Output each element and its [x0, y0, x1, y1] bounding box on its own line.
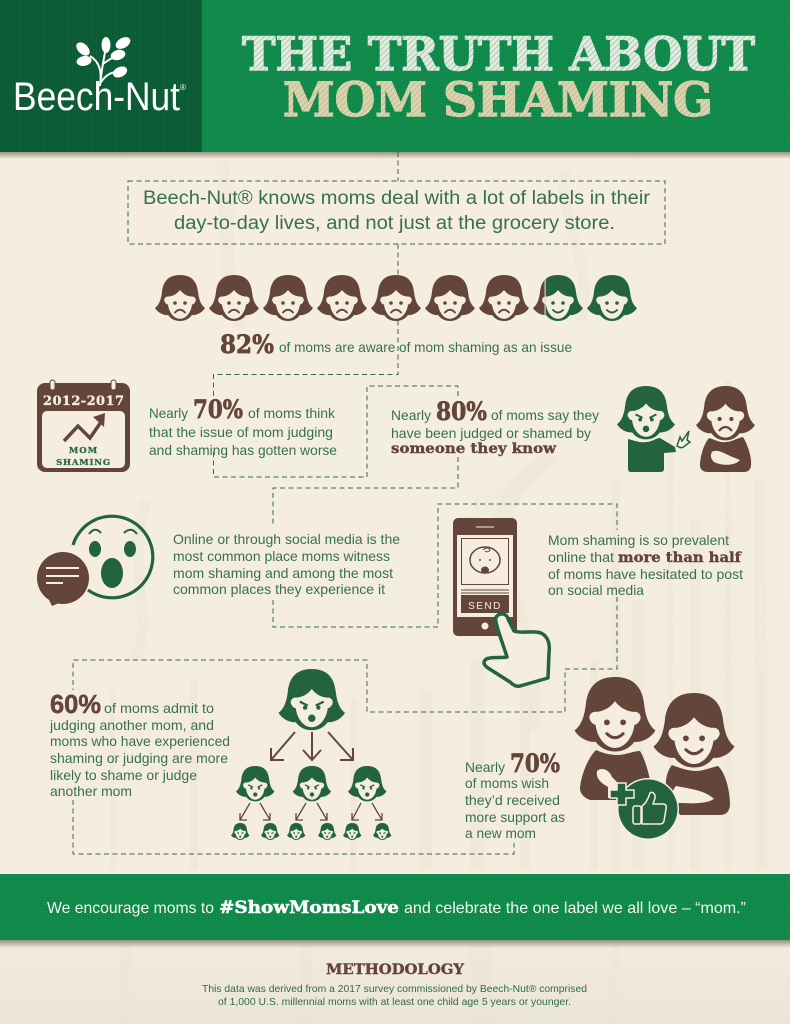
text: hesitated to post: more than half	[618, 550, 742, 566]
methodology text: This data was derived from a 2017 survey commissioned by Beech-Nut® comprised	[202, 983, 587, 995]
stat: 82 percent aware: 82%	[220, 330, 274, 359]
logo wordmark: Beech-Nut	[13, 75, 180, 119]
icon: two smiling moms with thumbs up	[574, 677, 734, 840]
stat: 70 percent wish for support: more support as	[465, 809, 565, 825]
stat: 80 percent judged: someone they know	[391, 441, 557, 457]
pointing mom	[617, 386, 690, 472]
call to action: and celebrate the one label we all love – “mom.”	[404, 900, 746, 917]
stat: 70 percent worse: Nearly	[149, 405, 188, 421]
stat: 70 percent wish for support: a new mom	[465, 825, 536, 841]
stat: 60 percent judging: 60%	[50, 689, 101, 719]
icon: mom pointing at sad mom	[617, 386, 755, 472]
icon: calendar 2012-2017: 2012-2017	[43, 394, 124, 409]
title line 1: THE TRUTH ABOUT	[242, 27, 755, 81]
text: online social media: mom shaming and among the most	[173, 565, 393, 581]
text: online social media	[173, 531, 400, 597]
stat: 60 percent judging: moms who have experienced	[50, 733, 230, 749]
stat: 80 percent judged	[391, 397, 599, 457]
stat: 70 percent worse: that the issue of mom judging	[149, 424, 333, 440]
stat: 80 percent judged: of moms say they	[491, 407, 599, 423]
mom one	[574, 677, 656, 800]
stat: 70 percent worse: and shaming has gotten worse	[149, 442, 337, 458]
stat: 60 percent judging: shaming or judging are more	[50, 750, 228, 766]
stat: 60 percent judging: likely to shame or judge	[50, 767, 197, 783]
text: hesitated to post: on social media	[548, 582, 644, 598]
call to action	[47, 898, 746, 918]
stat: 70 percent wish for support: 70%	[510, 749, 560, 778]
stat: 82 percent aware	[220, 330, 572, 359]
stat: 70 percent wish for support: they’d received	[465, 792, 560, 808]
call to action: We encourage moms to	[47, 900, 214, 917]
logo tree	[74, 35, 132, 86]
mom two	[654, 693, 734, 815]
level two arrows	[240, 803, 382, 820]
row of nine mom faces	[155, 275, 637, 321]
diagram: shaming spreads from mom to mom	[231, 669, 392, 840]
methodology heading: METHODOLOGY	[326, 962, 465, 978]
phone	[453, 518, 517, 636]
stat: 60 percent judging: judging another mom, and	[49, 717, 214, 733]
text: hesitated to post: of moms have hesitated to post	[548, 566, 743, 582]
intro line 1: Beech-Nut® knows moms deal with a lot of labels in their	[143, 188, 651, 209]
text: hesitated to post	[548, 532, 743, 598]
methodology text	[202, 983, 587, 1008]
text: hesitated to post: Mom shaming is so prevalent	[548, 532, 729, 548]
icon: phone with send button and hand	[453, 518, 549, 686]
methodology text: of 1,000 U.S. millennial moms with at least one child age 5 years or younger.	[218, 996, 571, 1008]
icon: calendar 2012-2017	[37, 380, 130, 472]
title line 2: MOM SHAMING	[283, 73, 713, 128]
stat: 70 percent wish for support	[465, 749, 565, 841]
registered mark: ®	[180, 83, 186, 92]
Beech-Nut logo	[13, 35, 186, 119]
call to action: #ShowMomsLove	[219, 898, 399, 918]
pointing hand	[484, 614, 549, 686]
stat: 70 percent wish for support: Nearly	[465, 759, 505, 775]
speech bubble	[37, 552, 89, 606]
stat: 70 percent wish for support: of moms wish	[465, 775, 549, 791]
stat: 80 percent judged: Nearly	[391, 407, 431, 423]
level three moms	[231, 823, 392, 840]
stat: 80 percent judged: have been judged or shamed by	[391, 425, 591, 441]
title	[242, 27, 755, 128]
text: online social media: Online or through social media is the	[173, 531, 400, 547]
stat: 80 percent judged: 80%	[436, 397, 487, 426]
level two moms	[236, 766, 386, 801]
thumbs up badge	[610, 778, 679, 840]
stat: 60 percent judging	[49, 689, 230, 799]
stat: 60 percent judging: another mom	[50, 783, 132, 799]
text: online social media: common places they experience it	[173, 581, 385, 597]
text: online social media: most common place moms witness	[173, 548, 390, 564]
icon: shocked emoji with speech bubble	[37, 516, 153, 606]
level one arrows	[271, 732, 353, 760]
stat: 70 percent worse: of moms think	[248, 405, 336, 421]
header banner	[0, 0, 790, 159]
sad mom with crossed arms	[696, 386, 755, 472]
shocked face	[73, 516, 153, 598]
text: hesitated to post: online that	[548, 549, 614, 565]
stat: 70 percent worse	[149, 395, 337, 458]
methodology	[202, 962, 587, 1008]
stat: 82 percent aware: of moms are aware of mom shaming as an issue	[279, 339, 572, 355]
footer banner	[0, 874, 790, 948]
icon: calendar 2012-2017: SHAMING	[56, 458, 111, 468]
icon: calendar 2012-2017: MOM	[69, 446, 98, 456]
intro callout	[128, 181, 665, 244]
intro line 2: day-to-day lives, and not just at the grocery store.	[174, 213, 615, 234]
stat: 60 percent judging: of moms admit to	[104, 700, 214, 716]
phone: SEND	[468, 601, 502, 612]
top mom	[278, 669, 345, 730]
stat: 70 percent worse: 70%	[193, 395, 243, 424]
dashed connector line	[73, 152, 617, 854]
